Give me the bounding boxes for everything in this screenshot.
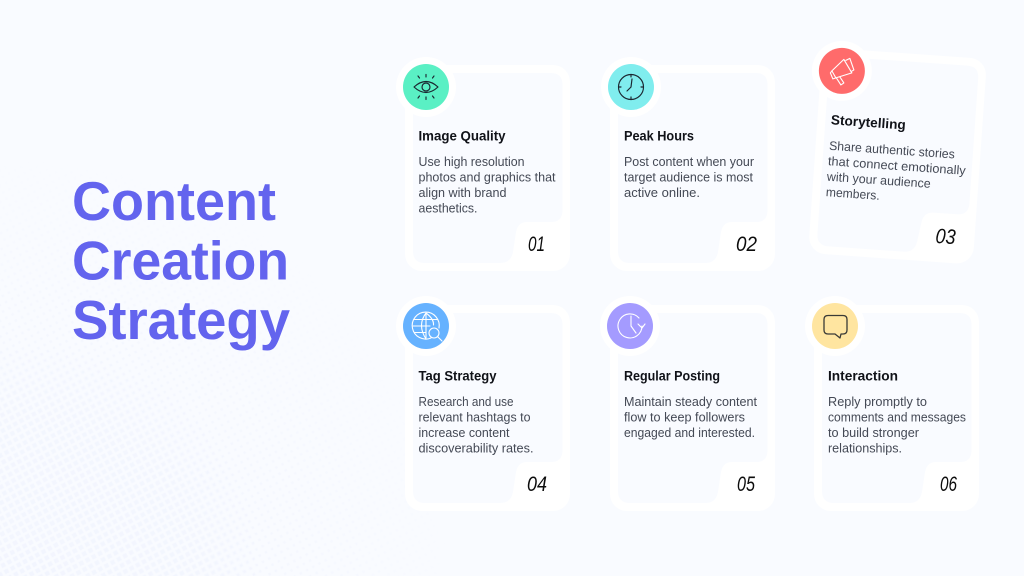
panel: image quality: 01	[528, 233, 545, 256]
panel: tag strategy: Tag Strategy	[418, 368, 497, 384]
panel: tag strategy: discoverability rates.	[418, 442, 534, 456]
panel: image quality: aesthetics.	[418, 202, 478, 216]
panel: interaction: relationships.	[828, 442, 902, 456]
panel: tag strategy: increase content	[418, 426, 510, 440]
panel: peak hours: target audience is most	[624, 170, 754, 184]
panel: storytelling: that connect emotionally	[828, 154, 967, 178]
title: Strategy	[72, 289, 290, 351]
icon: clock	[608, 64, 654, 110]
panel: tag strategy: Research and use	[418, 395, 514, 409]
panel: image quality: photos and graphics that	[418, 170, 556, 184]
panel: regular posting: engaged and interested.	[624, 426, 755, 440]
panel: tag strategy: 04	[527, 473, 547, 496]
panel: storytelling: Share authentic stories	[829, 139, 955, 161]
panel: storytelling	[799, 39, 988, 265]
panel: regular posting	[600, 296, 775, 511]
panel: regular posting: flow to keep followers	[624, 410, 745, 424]
panel: image quality: align with brand	[418, 186, 507, 200]
panel: interaction: 06	[940, 473, 957, 496]
panel: interaction: to build stronger	[828, 426, 919, 440]
panel: image quality: Image Quality	[418, 128, 506, 144]
panel: regular posting: 05	[737, 473, 755, 496]
icon: globe search	[403, 303, 449, 349]
title	[72, 170, 290, 351]
panel: interaction: Reply promptly to	[828, 395, 927, 409]
panel: peak hours: Peak Hours	[624, 128, 694, 144]
panel: image quality: Use high resolution	[418, 155, 525, 169]
panel: peak hours: 02	[736, 233, 757, 256]
icon: eye	[403, 64, 449, 110]
title: Content	[72, 170, 276, 232]
panel: interaction: Interaction	[828, 368, 898, 384]
panel: interaction: comments and messages	[828, 410, 966, 424]
panel: peak hours: Post content when your	[624, 155, 754, 169]
panel: image quality	[396, 57, 570, 271]
panel: tag strategy	[396, 296, 570, 511]
panel: peak hours: active online.	[624, 186, 700, 200]
panel: tag strategy: relevant hashtags to	[418, 410, 531, 424]
title: Creation	[72, 230, 289, 292]
panel: storytelling: with your audience	[825, 170, 931, 191]
panel: regular posting: Regular Posting	[624, 368, 720, 384]
panel: storytelling: members.	[825, 185, 880, 203]
panel: regular posting: Maintain steady content	[624, 395, 758, 409]
panel: storytelling: Storytelling	[830, 112, 906, 132]
icon: megaphone	[819, 48, 865, 94]
panel: storytelling: 03	[935, 225, 957, 249]
panel: interaction	[805, 296, 979, 511]
icon: clock with arrow	[607, 303, 653, 349]
panel: peak hours	[601, 57, 775, 271]
icon: speech bubble	[812, 303, 858, 349]
